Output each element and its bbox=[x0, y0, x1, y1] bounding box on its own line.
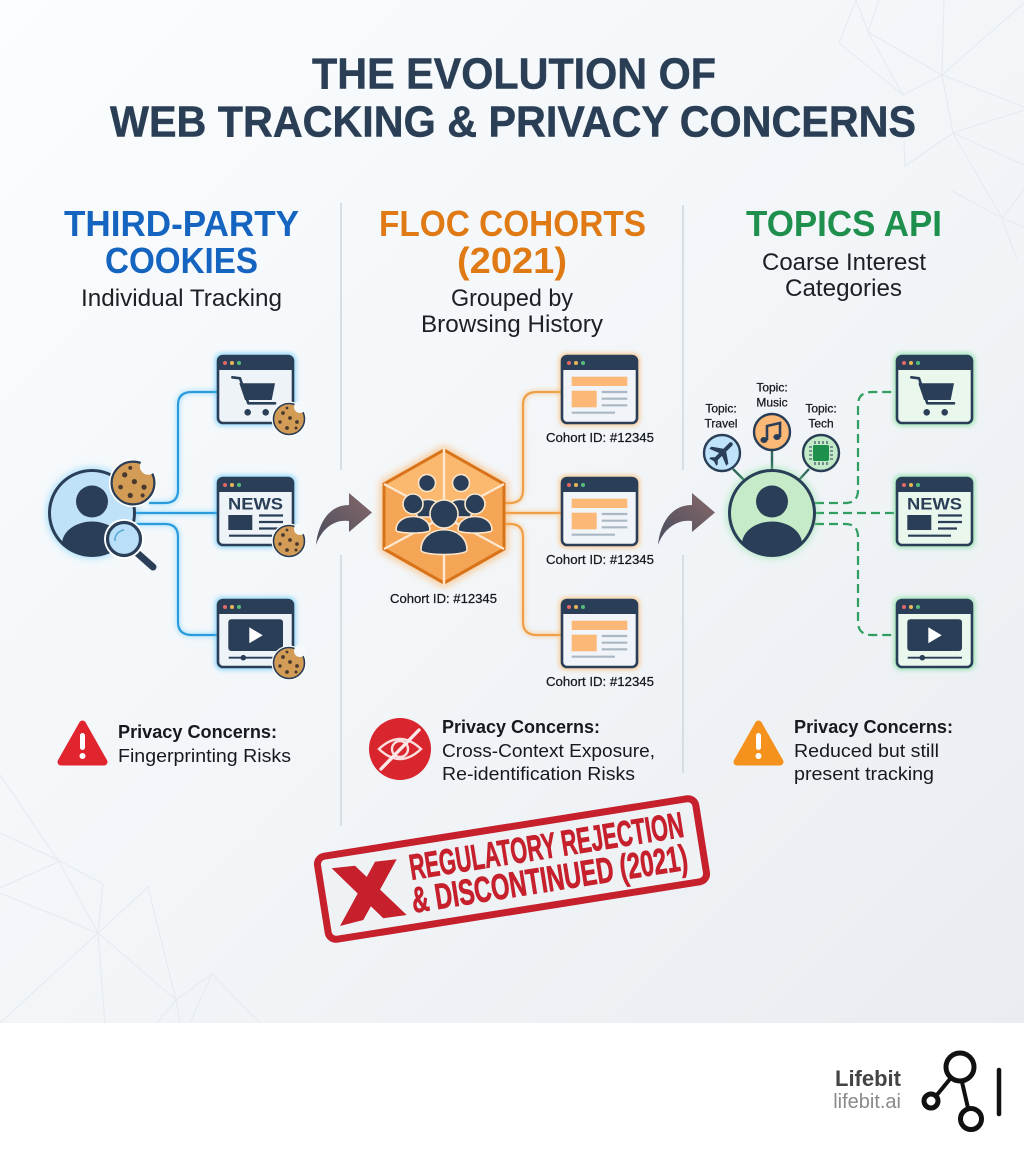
cohort hexagon with people bbox=[384, 448, 504, 585]
heading: floc cohorts: FLOC COHORTS bbox=[379, 203, 646, 244]
heading: third-party cookies: THIRD-PARTY bbox=[64, 203, 299, 244]
label: cohort id 2: Cohort ID: #12345 bbox=[546, 553, 654, 567]
icon: cookie on user bbox=[109, 458, 157, 507]
icon: stamp x mark bbox=[332, 859, 407, 926]
logo mark bbox=[924, 1053, 999, 1130]
label: topic travel bbox=[705, 402, 737, 430]
topic spokes bbox=[733, 451, 809, 482]
window: shop with cookie bbox=[215, 353, 306, 436]
connectors: cookies bbox=[135, 392, 218, 635]
label: topic travel: Topic: bbox=[705, 402, 737, 416]
icon: travel topic bbox=[704, 434, 741, 471]
arrow: floc to topics bbox=[658, 493, 715, 545]
user in topics bbox=[727, 468, 817, 559]
title: WEB TRACKING & PRIVACY CONCERNS bbox=[110, 98, 916, 146]
label: topic music bbox=[756, 380, 788, 410]
footer brand text bbox=[833, 1066, 902, 1113]
label: topic music: Topic: bbox=[756, 380, 788, 394]
label: topic music: Music bbox=[756, 396, 788, 410]
connectors: floc bbox=[506, 392, 562, 635]
heading: third-party cookies: Individual Tracking bbox=[81, 285, 282, 312]
window: floc page 2 bbox=[559, 475, 640, 548]
window: floc page 3 bbox=[559, 597, 640, 670]
heading: third-party cookies: COOKIES bbox=[105, 240, 258, 281]
text: privacy concerns floc bbox=[442, 717, 655, 784]
text: privacy concerns topics: present tracking bbox=[794, 764, 934, 784]
icon: music topic bbox=[754, 414, 790, 450]
arrow: cookies to floc bbox=[316, 493, 372, 545]
icon: orange warning triangle bbox=[737, 724, 780, 762]
footer brand text: Lifebit bbox=[835, 1066, 902, 1091]
icon: crossed eye bbox=[369, 718, 431, 780]
window: floc page 1 bbox=[559, 353, 640, 426]
heading: third-party cookies bbox=[64, 203, 299, 312]
text: privacy concerns cookies bbox=[118, 722, 291, 766]
icon: red warning triangle bbox=[61, 724, 104, 762]
footer band bbox=[0, 1023, 1024, 1154]
text: privacy concerns topics: Reduced but still bbox=[794, 741, 939, 761]
label: cohort id 1: Cohort ID: #12345 bbox=[546, 431, 654, 445]
heading: floc cohorts: (2021) bbox=[457, 240, 567, 281]
text: privacy concerns floc: Privacy Concerns: bbox=[442, 717, 600, 737]
title bbox=[110, 50, 916, 146]
window: video with cookie bbox=[215, 597, 306, 680]
label: topic tech bbox=[805, 402, 837, 430]
title: THE EVOLUTION OF bbox=[312, 50, 716, 98]
icon: magnifier bbox=[104, 519, 153, 567]
window: topics shop bbox=[894, 353, 975, 426]
label: cohort id: Cohort ID: #12345 bbox=[390, 592, 497, 606]
text: privacy concerns cookies: Privacy Concerns: bbox=[118, 722, 277, 742]
icon: tech topic bbox=[803, 435, 839, 471]
stamp: regulatory rejection bbox=[316, 798, 708, 940]
heading: topics api bbox=[746, 203, 942, 302]
people group bbox=[396, 474, 492, 554]
heading: topics api: Coarse Interest bbox=[762, 249, 926, 276]
text: privacy concerns cookies: Fingerprinting Risks bbox=[118, 746, 291, 766]
window: topics video bbox=[894, 597, 975, 670]
heading: floc cohorts: Grouped by bbox=[451, 285, 573, 312]
text: privacy concerns floc: Re-identification Risks bbox=[442, 764, 635, 784]
column dividers bbox=[341, 203, 683, 826]
heading: topics api: Categories bbox=[785, 275, 902, 302]
stamp: regulatory rejection: & DISCONTINUED (2021) bbox=[408, 837, 690, 921]
label: cohort id 3: Cohort ID: #12345 bbox=[546, 675, 654, 689]
label: topic tech: Topic: bbox=[805, 402, 837, 416]
text: privacy concerns topics: Privacy Concerns: bbox=[794, 717, 953, 737]
label: topic travel: Travel bbox=[705, 416, 737, 430]
label: topic tech: Tech bbox=[808, 416, 834, 430]
heading: floc cohorts bbox=[379, 203, 646, 338]
user with cookie and magnifier bbox=[47, 458, 157, 567]
window: news with cookie bbox=[215, 475, 306, 558]
connectors: topics dashed bbox=[815, 392, 897, 635]
text: privacy concerns floc: Cross-Context Exposure, bbox=[442, 741, 655, 761]
window: topics news bbox=[894, 475, 975, 548]
text: privacy concerns topics bbox=[794, 717, 953, 784]
heading: topics api: TOPICS API bbox=[746, 203, 942, 244]
stamp: regulatory rejection: REGULATORY REJECTION bbox=[406, 804, 686, 888]
footer brand text: lifebit.ai bbox=[833, 1091, 901, 1113]
heading: floc cohorts: Browsing History bbox=[421, 311, 603, 338]
